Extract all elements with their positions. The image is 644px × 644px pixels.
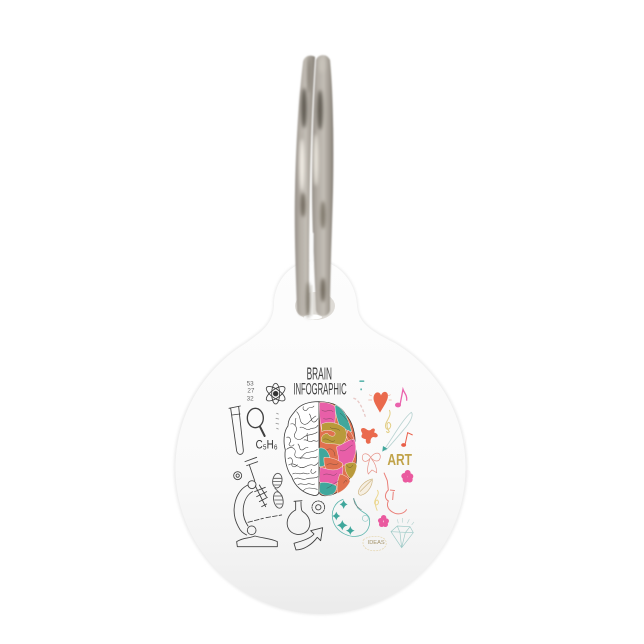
- icon: pink flower: [401, 470, 413, 483]
- pet tag body: [174, 260, 467, 615]
- art icons: [332, 380, 414, 551]
- icon: bow: [362, 453, 380, 474]
- icon: lips: [358, 479, 372, 495]
- icon: idea bulb: [363, 536, 386, 551]
- icon: pale gold clef: [375, 490, 378, 511]
- icon: idea bulb: IDEAS: [368, 540, 385, 546]
- icon: formulas: [247, 380, 255, 403]
- icon: small note: [276, 413, 279, 429]
- icon: small gear: [234, 472, 242, 480]
- icon: teal dashes: [359, 380, 364, 390]
- icon: formulas: 27: [247, 388, 255, 395]
- split ring: [295, 55, 333, 318]
- artwork: brain infographic: INFOGRAPHIC: [293, 379, 347, 398]
- icon: pale brush: [353, 398, 366, 418]
- science icons: [229, 380, 325, 550]
- icon: diamond: [391, 518, 414, 548]
- icon: orange splat: [361, 428, 378, 444]
- icon: violin: [384, 473, 407, 514]
- icon: atom: [264, 383, 287, 404]
- left brain hemisphere: [284, 402, 319, 495]
- icon: curved arrow: [294, 528, 323, 550]
- icon: heart: [368, 392, 392, 413]
- icon: red note: [402, 433, 413, 446]
- icon: paintbrush: [382, 412, 412, 452]
- icon: formulas: 53: [247, 380, 254, 387]
- artwork: brain infographic: [229, 363, 414, 551]
- icon: cog: [312, 501, 325, 514]
- icon: pink flower small: [378, 515, 389, 527]
- title: [293, 363, 347, 398]
- icon: test tube: [229, 406, 243, 454]
- icon: flask: [287, 501, 310, 534]
- icon: magnifying glass: [247, 408, 265, 436]
- icon: dna helix: [272, 473, 285, 509]
- formula label: C₅H₆: [256, 438, 278, 452]
- right brain hemisphere: [319, 402, 357, 496]
- icon: microscope: [234, 457, 282, 547]
- title: BRAIN: [307, 363, 332, 383]
- label: ART: ART: [387, 452, 412, 469]
- icon: palette: [332, 498, 370, 536]
- icon: pink note: [396, 389, 407, 407]
- icon: formulas: 32: [247, 396, 254, 403]
- icon: gold treble clef: [385, 410, 391, 433]
